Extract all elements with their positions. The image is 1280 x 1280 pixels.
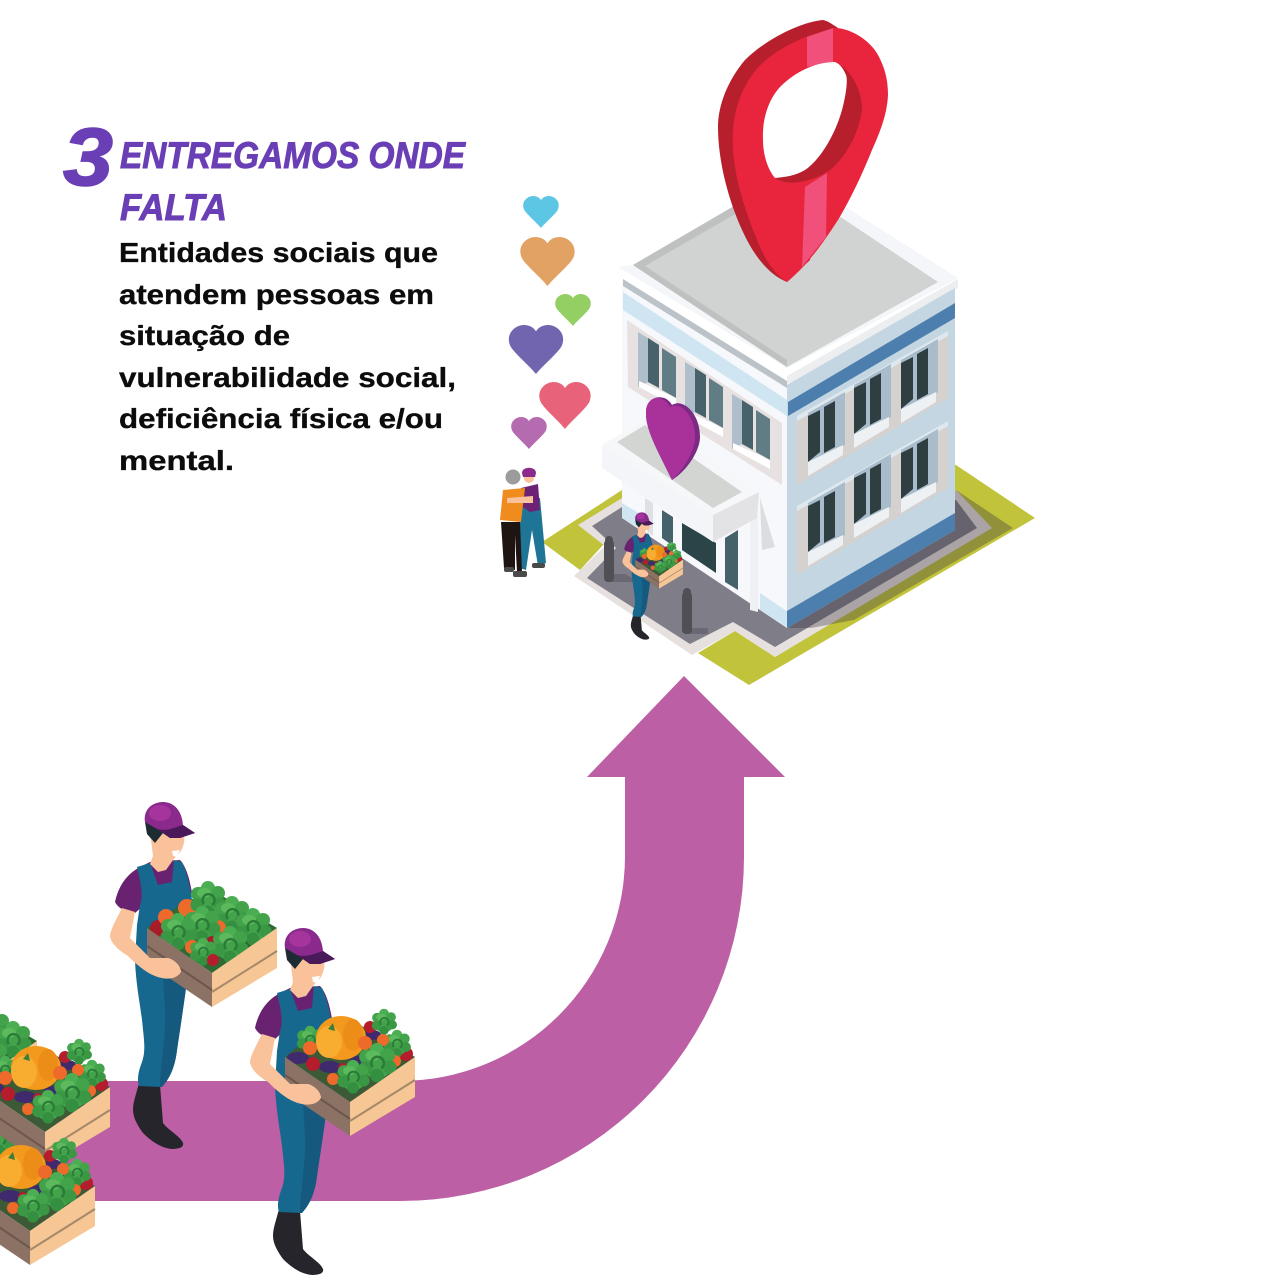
body text: mental. (119, 445, 234, 476)
canopy (602, 418, 775, 550)
body text (119, 237, 456, 476)
body text: atendem pessoas em (119, 279, 434, 310)
worker carrying lettuce crate (110, 802, 277, 1149)
ground plot (542, 465, 1035, 685)
stacked crates (0, 994, 110, 1265)
small worker with crate (622, 512, 683, 640)
magenta heart (646, 397, 700, 480)
body text: Entidades sociais que (119, 237, 438, 268)
body text: deficiência física e/ou (119, 403, 443, 434)
title (120, 135, 466, 228)
curved arrow (60, 676, 785, 1201)
right wall (787, 288, 955, 628)
body text: situação de (119, 320, 290, 351)
title: ENTREGAMOS ONDE (120, 135, 466, 176)
hugging couple (500, 468, 546, 577)
roof (618, 172, 958, 387)
number 3: 3 (63, 112, 113, 203)
floating hearts (509, 196, 591, 449)
entrance (645, 498, 758, 612)
bollards (604, 536, 692, 634)
worker carrying pumpkin crate (250, 928, 415, 1275)
location pin (718, 20, 888, 282)
title: FALTA (120, 187, 227, 228)
building (602, 172, 958, 628)
body text: vulnerabilidade social, (119, 362, 456, 393)
left wall (622, 279, 788, 628)
